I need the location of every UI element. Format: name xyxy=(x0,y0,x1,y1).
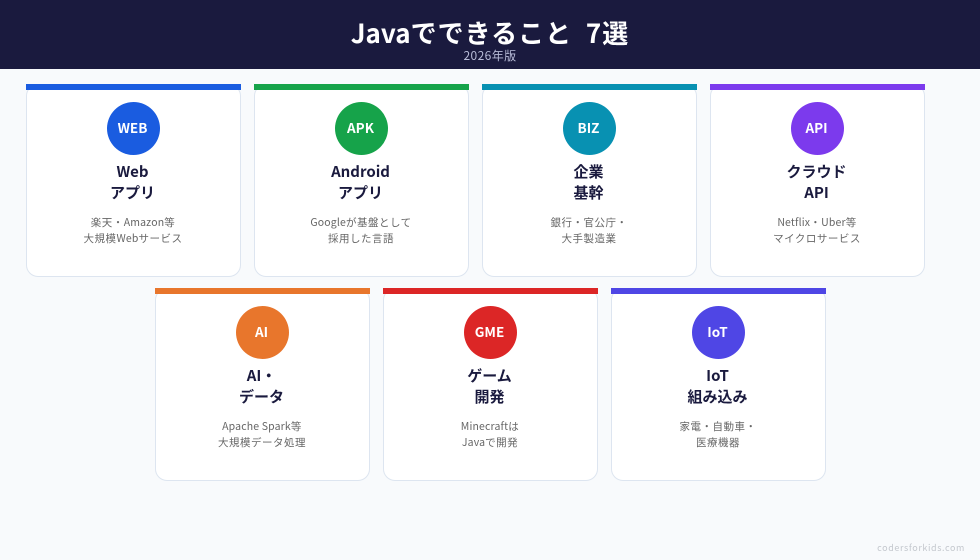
icon: IoT badge xyxy=(692,306,745,359)
subtitle: 2026年版 xyxy=(463,47,517,64)
icon: BIZ badge: BIZ xyxy=(578,117,599,137)
icon: WEB badge: WEB xyxy=(118,117,147,137)
text: Web apps description: 大規模Webサービス xyxy=(84,231,182,246)
title: Javaでできること 7選 xyxy=(351,14,629,51)
heading: Android apps xyxy=(331,161,390,203)
text: IoT description: 医療機器 xyxy=(696,435,740,450)
text: enterprise description: 銀行・官公庁・ xyxy=(550,215,628,230)
text: enterprise description xyxy=(550,215,628,246)
icon: IoT badge: IoT xyxy=(707,321,728,341)
heading: Web apps: Web xyxy=(116,161,149,182)
text: cloud API description: マイクロサービス xyxy=(773,231,861,246)
text: Web apps description xyxy=(84,215,182,246)
heading: cloud API xyxy=(786,161,846,203)
heading: AI and data xyxy=(239,365,284,407)
heading: Android apps: Android xyxy=(331,161,390,182)
heading: IoT embedded: 組み込み xyxy=(687,386,748,407)
text: Android description: 採用した言語 xyxy=(328,231,394,246)
panel: enterprise systems xyxy=(482,84,697,277)
panel: cloud API xyxy=(710,84,925,277)
text: AI description: Apache Spark等 xyxy=(222,419,302,434)
text: cloud API description xyxy=(773,215,861,246)
heading: game development: 開発 xyxy=(474,386,504,407)
text: Web apps description: 楽天・Amazon等 xyxy=(91,215,175,230)
panel: IoT embedded xyxy=(611,288,826,481)
panel: AI and data xyxy=(155,288,370,481)
heading: enterprise systems: 企業 xyxy=(573,161,604,182)
footer credit: codersforkids.com xyxy=(877,541,965,554)
heading: Web apps xyxy=(110,161,155,203)
icon: GME badge: GME xyxy=(475,321,504,341)
panel: game development xyxy=(383,288,598,481)
text: cloud API description: Netflix・Uber等 xyxy=(777,215,857,230)
icon: WEB badge xyxy=(107,102,160,155)
panel: Android apps xyxy=(254,84,469,277)
heading: game development: ゲーム xyxy=(467,365,512,386)
heading: Web apps: アプリ xyxy=(110,182,155,203)
icon: API badge xyxy=(791,102,844,155)
text: game description: Minecraftは xyxy=(461,419,519,434)
text: game description: Javaで開発 xyxy=(462,435,518,450)
text: Android description: Googleが基盤として xyxy=(310,215,412,230)
text: Android description xyxy=(310,215,412,246)
icon: BIZ badge xyxy=(563,102,616,155)
text: enterprise description: 大手製造業 xyxy=(562,231,616,246)
heading: game development xyxy=(467,365,512,407)
heading: AI and data: AI・ xyxy=(247,365,276,386)
text: IoT description xyxy=(680,419,756,450)
heading: IoT embedded xyxy=(687,365,748,407)
heading: cloud API: API xyxy=(804,182,829,203)
icon: AI badge: AI xyxy=(255,321,268,341)
icon: AI badge xyxy=(236,306,289,359)
panel: Web apps xyxy=(26,84,241,277)
text: IoT description: 家電・自動車・ xyxy=(680,419,756,434)
icon: APK badge: APK xyxy=(347,117,374,137)
heading: enterprise systems xyxy=(573,161,604,203)
icon: API badge: API xyxy=(805,117,828,137)
header band xyxy=(0,0,980,69)
heading: enterprise systems: 基幹 xyxy=(573,182,604,203)
heading: IoT embedded: IoT xyxy=(706,365,729,386)
icon: GME badge xyxy=(464,306,517,359)
text: AI description xyxy=(218,419,306,450)
heading: cloud API: クラウド xyxy=(786,161,846,182)
icon: APK badge xyxy=(335,102,388,155)
text: game description xyxy=(461,419,519,450)
heading: AI and data: データ xyxy=(239,386,284,407)
heading: Android apps: アプリ xyxy=(338,182,383,203)
text: AI description: 大規模データ処理 xyxy=(218,435,306,450)
